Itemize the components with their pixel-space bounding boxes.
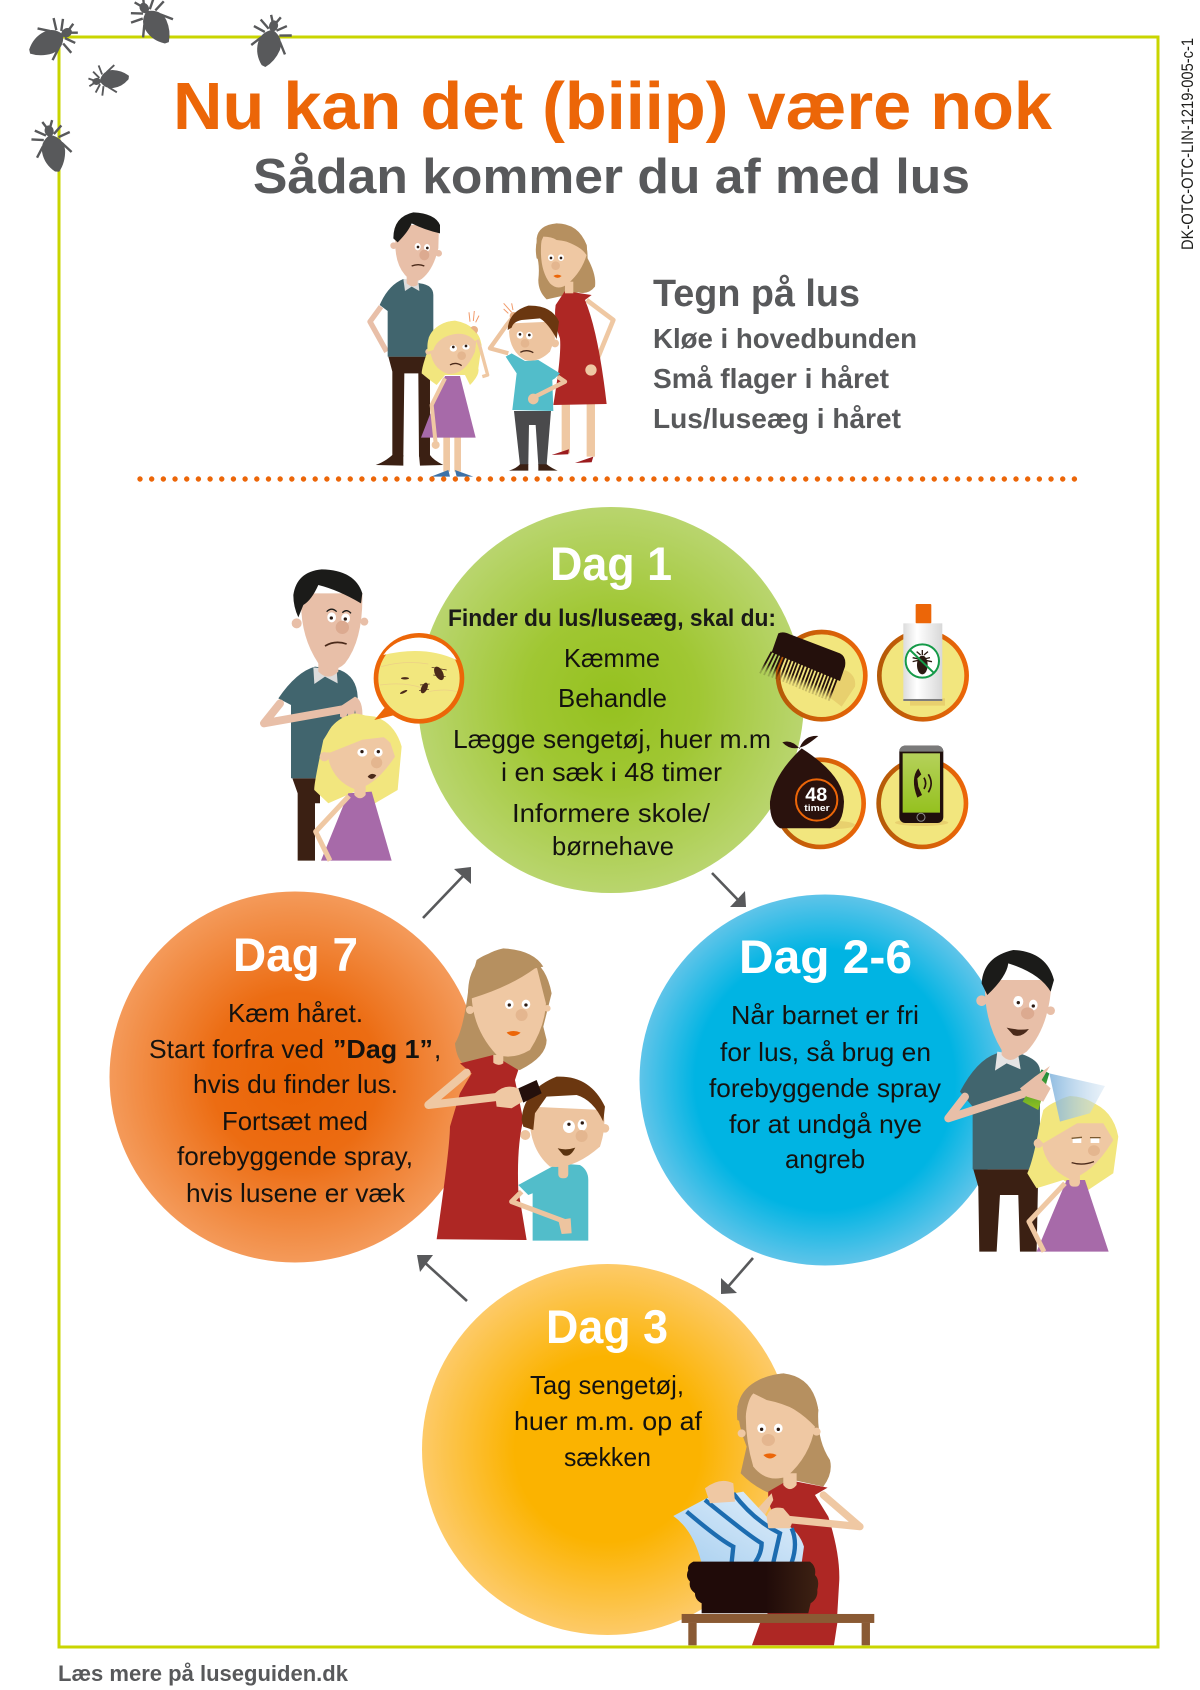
father — [370, 212, 443, 466]
text block: day 7: Dag 7 — [233, 928, 358, 981]
arrow: day 3 to day 7 — [417, 1255, 467, 1301]
comb and hand — [495, 1080, 542, 1108]
text block: day 1: Dag 1 — [550, 537, 672, 590]
text block: signs of lice: Små flager i håret — [653, 363, 889, 394]
text block: day 7: Kæm håret. — [228, 998, 363, 1028]
icon: comb — [760, 632, 865, 719]
striped bedding — [673, 1481, 804, 1563]
basket — [687, 1562, 818, 1613]
text block: day 2-6: for at undgå nye — [729, 1109, 922, 1139]
girl scratching — [421, 311, 488, 477]
icons: day 1 actions — [760, 604, 967, 847]
illustration: mother combing son's hair — [428, 948, 609, 1241]
text block: signs of lice: Lus/luseæg i håret — [653, 403, 901, 434]
circle: day 1 — [418, 507, 804, 893]
text block: day 1: Kæmme — [564, 643, 660, 673]
arrow: day 7 to day 1 — [423, 867, 471, 918]
boy scratching — [490, 303, 565, 471]
icon: small louse — [87, 62, 131, 97]
text block: day 7: hvis du finder lus. — [193, 1069, 398, 1099]
subtitle: Sådan kommer du af med lus — [253, 150, 970, 204]
title: Nu kan det (biiip) være nok — [173, 69, 1053, 144]
text block: day 2-6 — [709, 930, 941, 1174]
girl — [314, 713, 402, 861]
illustration: father spraying daughter's hair — [948, 950, 1118, 1252]
father — [264, 569, 368, 861]
icon: spray bottle — [879, 604, 967, 719]
arrow: day 1 to day 2-6 — [712, 873, 746, 907]
illustration: father checking daughter's hair — [264, 569, 462, 861]
text block: day 1: børnehave — [552, 831, 674, 861]
text block: day 3: Dag 3 — [546, 1300, 668, 1353]
text block: day 7: forebyggende spray, — [177, 1141, 413, 1171]
mother — [428, 948, 552, 1240]
text block: day 1: Informere skole/ — [512, 798, 711, 828]
mother — [536, 223, 613, 463]
text block: day 1 — [448, 537, 776, 861]
boy — [512, 1077, 609, 1241]
label: 48 timer — [804, 785, 830, 813]
text block: signs of lice: Kløe i hovedbunden — [653, 323, 917, 354]
text block: day 1: i en sæk i 48 timer — [501, 757, 722, 787]
text block: day 2-6: Dag 2-6 — [739, 930, 912, 983]
circle: day 7 — [110, 892, 480, 1262]
text block: day 7: ”Dag 1” — [333, 1034, 433, 1064]
icon: garbage bag 48 hours — [770, 736, 864, 847]
text block: day 7 — [149, 928, 441, 1208]
text block: day 1: Lægge sengetøj, huer m.m — [453, 724, 771, 754]
text block: day 2-6: forebyggende spray — [709, 1073, 941, 1103]
spray mist — [1049, 1073, 1105, 1122]
text block: day 2-6: angreb — [785, 1144, 865, 1174]
text block: day 7: , — [434, 1034, 441, 1064]
arrow: day 2-6 to day 3 — [721, 1258, 753, 1294]
label: 48 timer: 48 — [805, 785, 828, 806]
mother — [737, 1373, 860, 1645]
text block: day 3: huer m.m. op af — [514, 1406, 703, 1436]
text block: day 1: Finder du lus/luseæg, skal du: — [448, 605, 776, 632]
father — [948, 950, 1055, 1252]
text block: day 2-6: Når barnet er fri — [731, 1000, 919, 1030]
footer link text: Læs mere på luseguiden.dk — [58, 1661, 348, 1686]
text block: day 1: Behandle — [558, 683, 667, 713]
illustration: mother taking bedding from basket — [673, 1373, 874, 1645]
text block: day 3: Tag sengetøj, — [530, 1370, 684, 1400]
text block: day 3: sækken — [564, 1442, 651, 1472]
illustration: worried family — [370, 212, 613, 477]
text block: day 7: Fortsæt med — [222, 1106, 368, 1136]
text block: day 2-6: for lus, så brug en — [720, 1037, 931, 1067]
text block: day 3 — [514, 1300, 703, 1472]
text block: signs of lice — [653, 273, 917, 434]
magnifying bubble with lice — [374, 635, 462, 721]
text block: day 7: hvis lusene er væk — [186, 1178, 406, 1208]
circle: day 2-6 — [640, 894, 1010, 1266]
table — [682, 1614, 874, 1645]
girl — [1027, 1096, 1118, 1252]
text block: day 7: Start forfra ved — [149, 1034, 324, 1064]
text block: signs of lice: Tegn på lus — [653, 273, 860, 315]
document code: DK-OTC-OTC-LIN-1219-005-c-1 — [1178, 38, 1197, 250]
icon: louse top left — [21, 11, 85, 70]
icon: louse top right — [245, 12, 295, 71]
icon: phone — [879, 746, 966, 847]
icon: louse top — [123, 0, 184, 54]
label: 48 timer: timer — [804, 803, 830, 813]
icon: louse on left border — [29, 117, 77, 176]
circle: day 3 — [422, 1264, 793, 1635]
